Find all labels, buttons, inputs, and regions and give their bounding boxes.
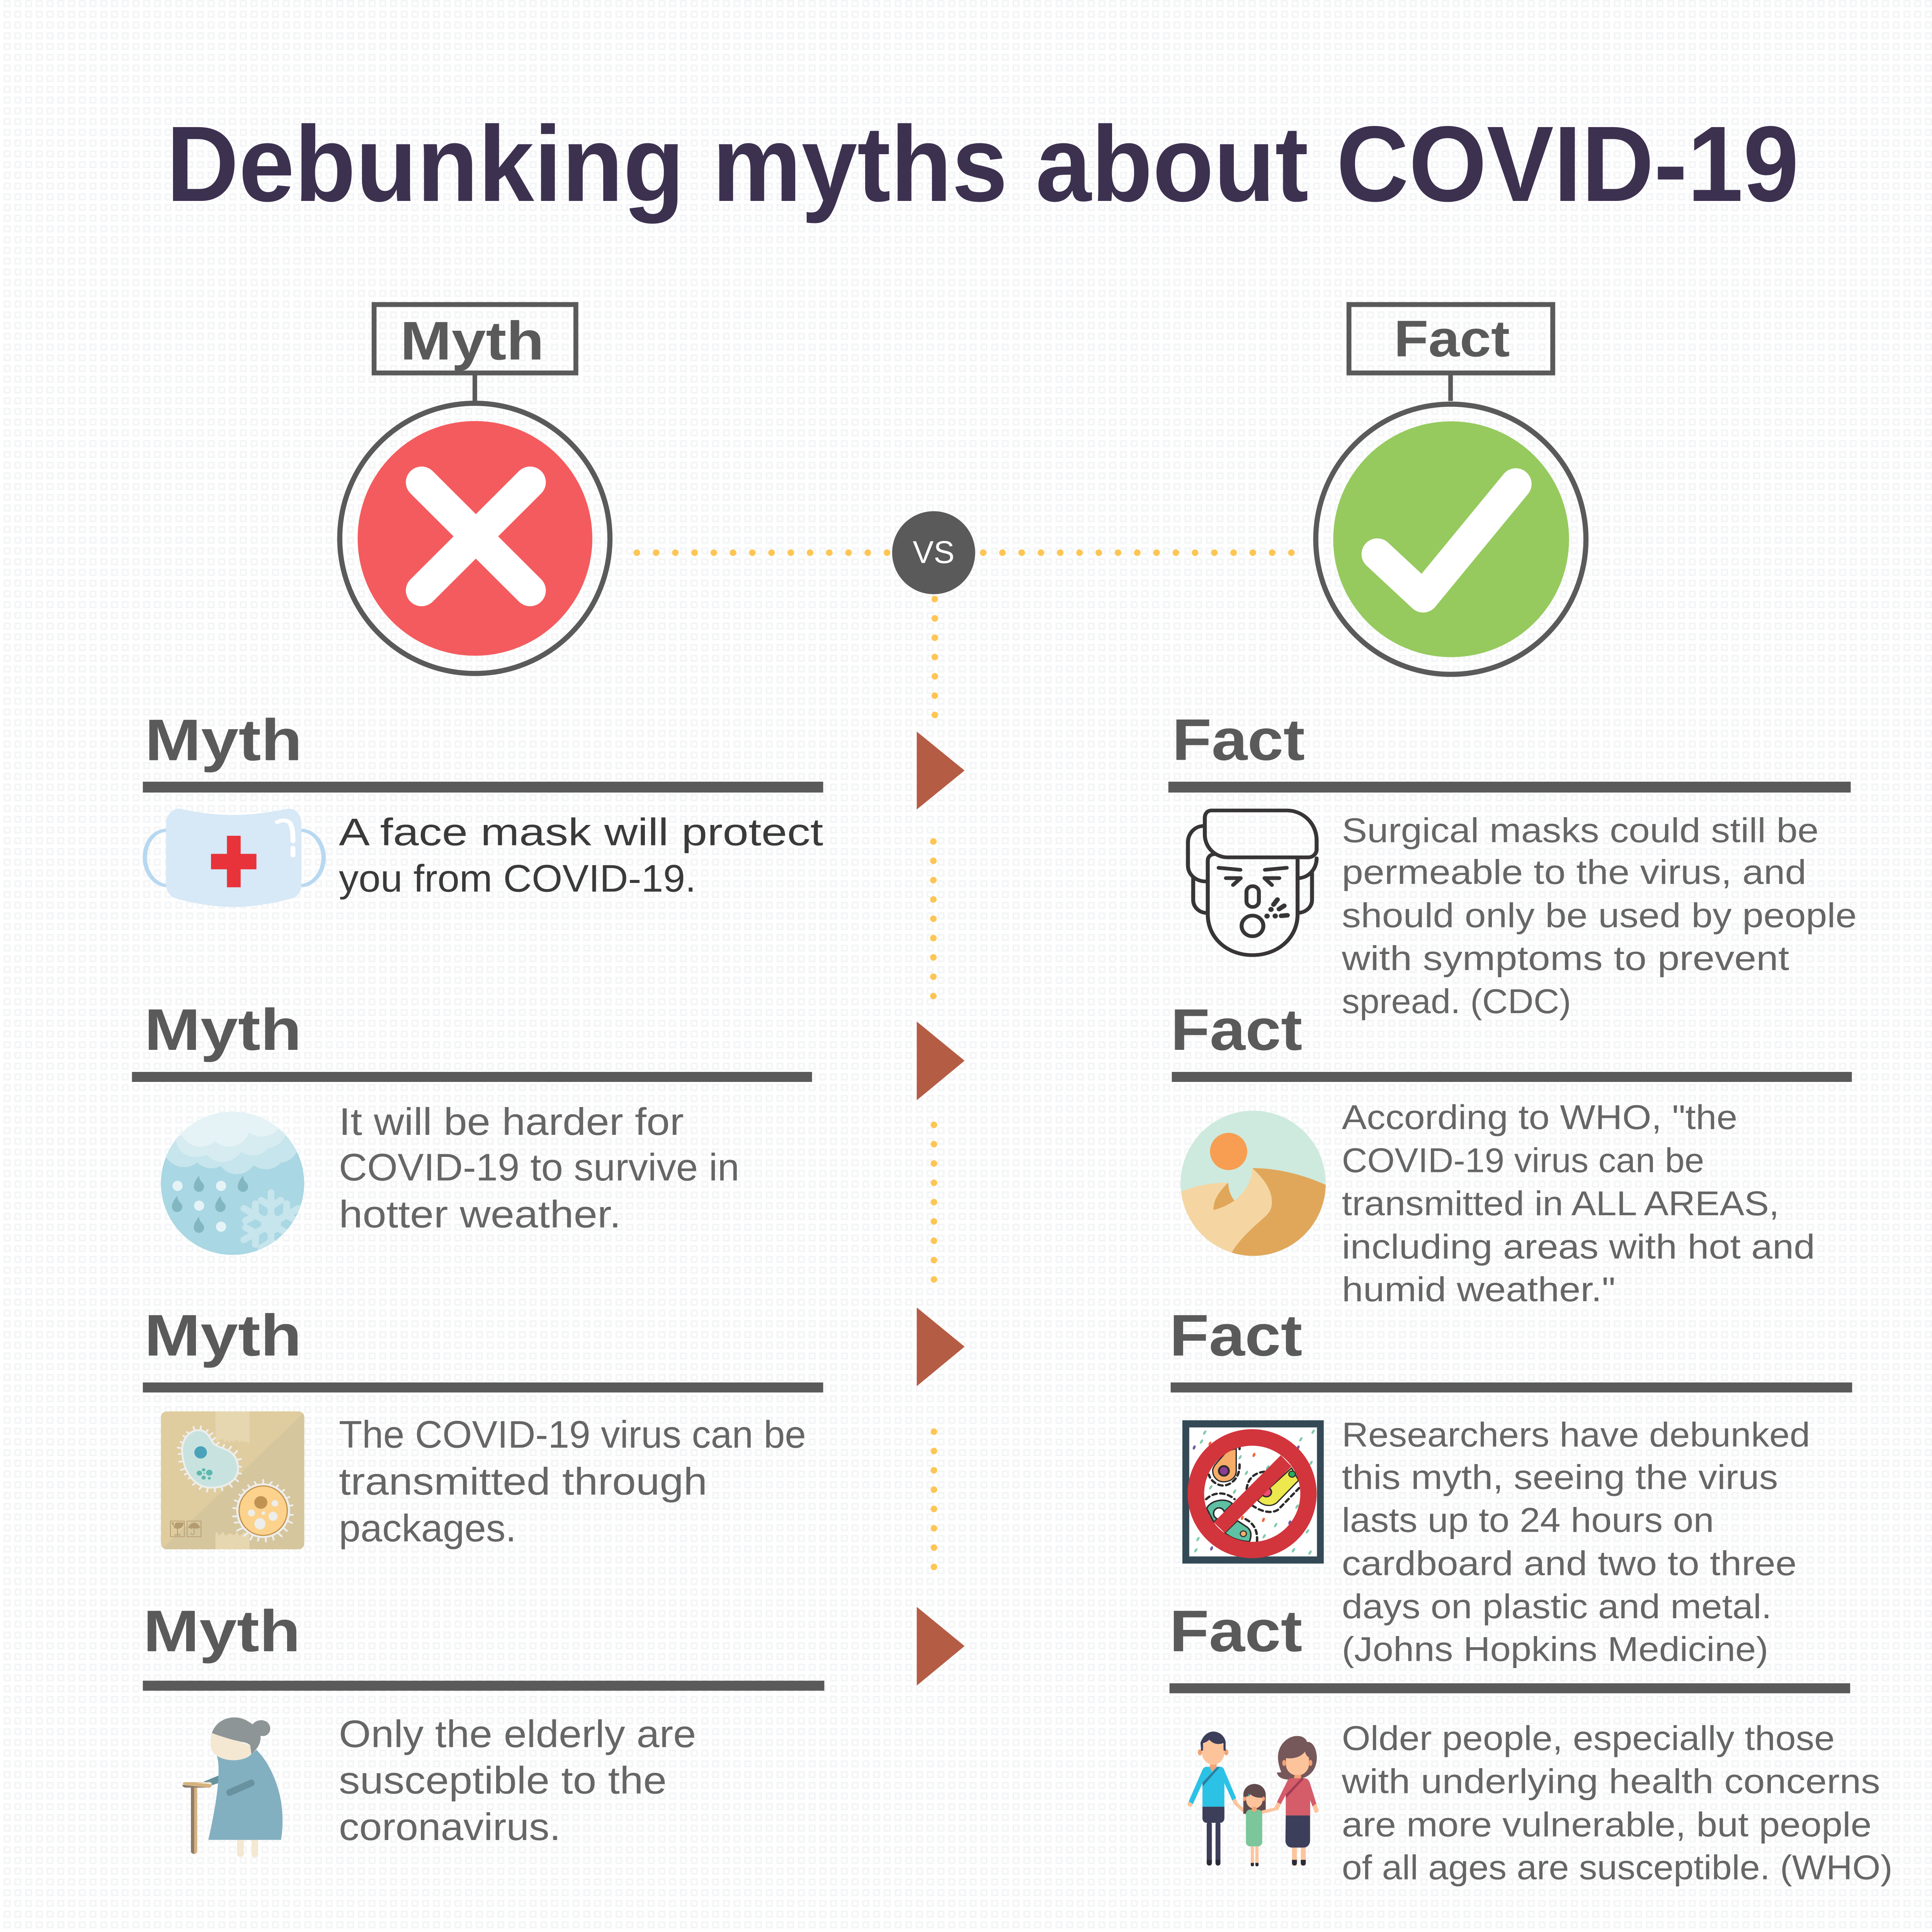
text: you from COVID-19. <box>339 857 696 900</box>
icon: sneezing man <box>1188 811 1316 955</box>
VS badge <box>892 511 975 594</box>
heading: Myth <box>144 997 302 1063</box>
arrow 3 <box>917 1308 964 1386</box>
arrow 2 <box>917 1022 964 1100</box>
heading: Myth <box>143 1599 301 1664</box>
figure: woman <box>1277 1736 1319 1866</box>
text: COVID-19 to survive in <box>339 1146 739 1189</box>
text <box>1342 1416 1810 1668</box>
text <box>339 811 823 900</box>
icon: no germs sign <box>1182 1420 1324 1564</box>
arrow 1 <box>917 731 964 810</box>
figure: girl <box>1243 1784 1281 1866</box>
connector: dotted lines <box>637 553 1292 1568</box>
panel: myth 2 <box>132 997 812 1255</box>
text: (Johns Hopkins Medicine) <box>1342 1630 1768 1668</box>
label box: Fact <box>1349 304 1553 373</box>
text: According to WHO, "the <box>1342 1098 1737 1136</box>
text: susceptible to the <box>339 1759 667 1802</box>
icon: elderly woman <box>182 1718 282 1857</box>
heading: Fact <box>1170 1303 1302 1368</box>
text: Surgical masks could still be <box>1342 811 1819 849</box>
text: Researchers have debunked <box>1342 1416 1810 1454</box>
text: of all ages are susceptible. (WHO) <box>1342 1849 1893 1887</box>
heading: Myth <box>145 707 302 773</box>
panel: fact 4 <box>1170 1599 1893 1887</box>
text: this myth, seeing the virus <box>1342 1458 1778 1496</box>
germ: orange <box>233 1480 293 1542</box>
text: spread. (CDC) <box>1342 982 1571 1020</box>
title: Debunking myths about COVID-19 <box>166 104 1799 224</box>
text: days on plastic and metal. <box>1342 1587 1772 1626</box>
panel: myth 4 <box>143 1599 824 1857</box>
text: A face mask will protect <box>339 811 823 854</box>
text <box>1342 1098 1815 1308</box>
heading: Fact <box>1172 707 1305 773</box>
text: should only be used by people <box>1342 896 1857 934</box>
icon: red cross circle <box>340 403 610 673</box>
text: Older people, especially those <box>1342 1719 1835 1757</box>
text: Only the elderly are <box>339 1713 696 1755</box>
figure: man <box>1187 1731 1247 1866</box>
heading: Fact <box>1171 997 1302 1063</box>
panel: myth badge <box>340 304 610 673</box>
panel: fact 1 <box>1168 707 1857 1020</box>
text: with underlying health concerns <box>1341 1762 1880 1801</box>
panel: myth 3 <box>143 1303 823 1550</box>
text: including areas with hot and <box>1342 1228 1815 1266</box>
text: permeable to the virus, and <box>1342 853 1806 891</box>
panel: fact badge <box>1316 304 1586 674</box>
icon: package with germs <box>161 1412 309 1550</box>
panel: myth 1 <box>143 707 823 907</box>
icon: desert <box>1180 1111 1326 1256</box>
text <box>1341 811 1857 1020</box>
text: with symptoms to prevent <box>1341 939 1789 977</box>
text: cardboard and two to three <box>1342 1544 1797 1582</box>
text <box>339 1100 739 1236</box>
germ: blue <box>178 1426 241 1492</box>
label box: Myth <box>374 304 576 373</box>
icon: green check circle <box>1316 404 1586 674</box>
text: coronavirus. <box>339 1806 561 1849</box>
text: packages. <box>339 1507 516 1550</box>
panel: fact 3 <box>1170 1303 1852 1668</box>
text <box>339 1413 806 1550</box>
text: transmitted through <box>339 1460 707 1503</box>
VS badge: VS <box>913 535 954 570</box>
text <box>1341 1719 1893 1887</box>
label box: Fact: Fact <box>1394 310 1510 367</box>
label box: Myth: Myth <box>400 310 544 371</box>
text: lasts up to 24 hours on <box>1342 1501 1714 1539</box>
text: transmitted in ALL AREAS, <box>1342 1184 1779 1223</box>
text: COVID-19 virus can be <box>1342 1141 1704 1179</box>
text: It will be harder for <box>339 1100 684 1143</box>
heading: Fact <box>1170 1599 1302 1664</box>
symbols: fragile and keep dry <box>170 1521 201 1537</box>
text <box>339 1713 696 1849</box>
text: are more vulnerable, but people <box>1342 1806 1872 1844</box>
text: humid weather." <box>1342 1270 1616 1308</box>
icon: face mask <box>145 809 323 907</box>
text: hotter weather. <box>339 1193 621 1236</box>
heading: Myth <box>144 1303 302 1368</box>
text: The COVID-19 virus can be <box>339 1413 806 1456</box>
icon: cold weather <box>161 1111 304 1255</box>
arrow 4 <box>917 1607 964 1685</box>
icon: family <box>1187 1731 1319 1866</box>
panel: fact 2 <box>1171 997 1852 1308</box>
